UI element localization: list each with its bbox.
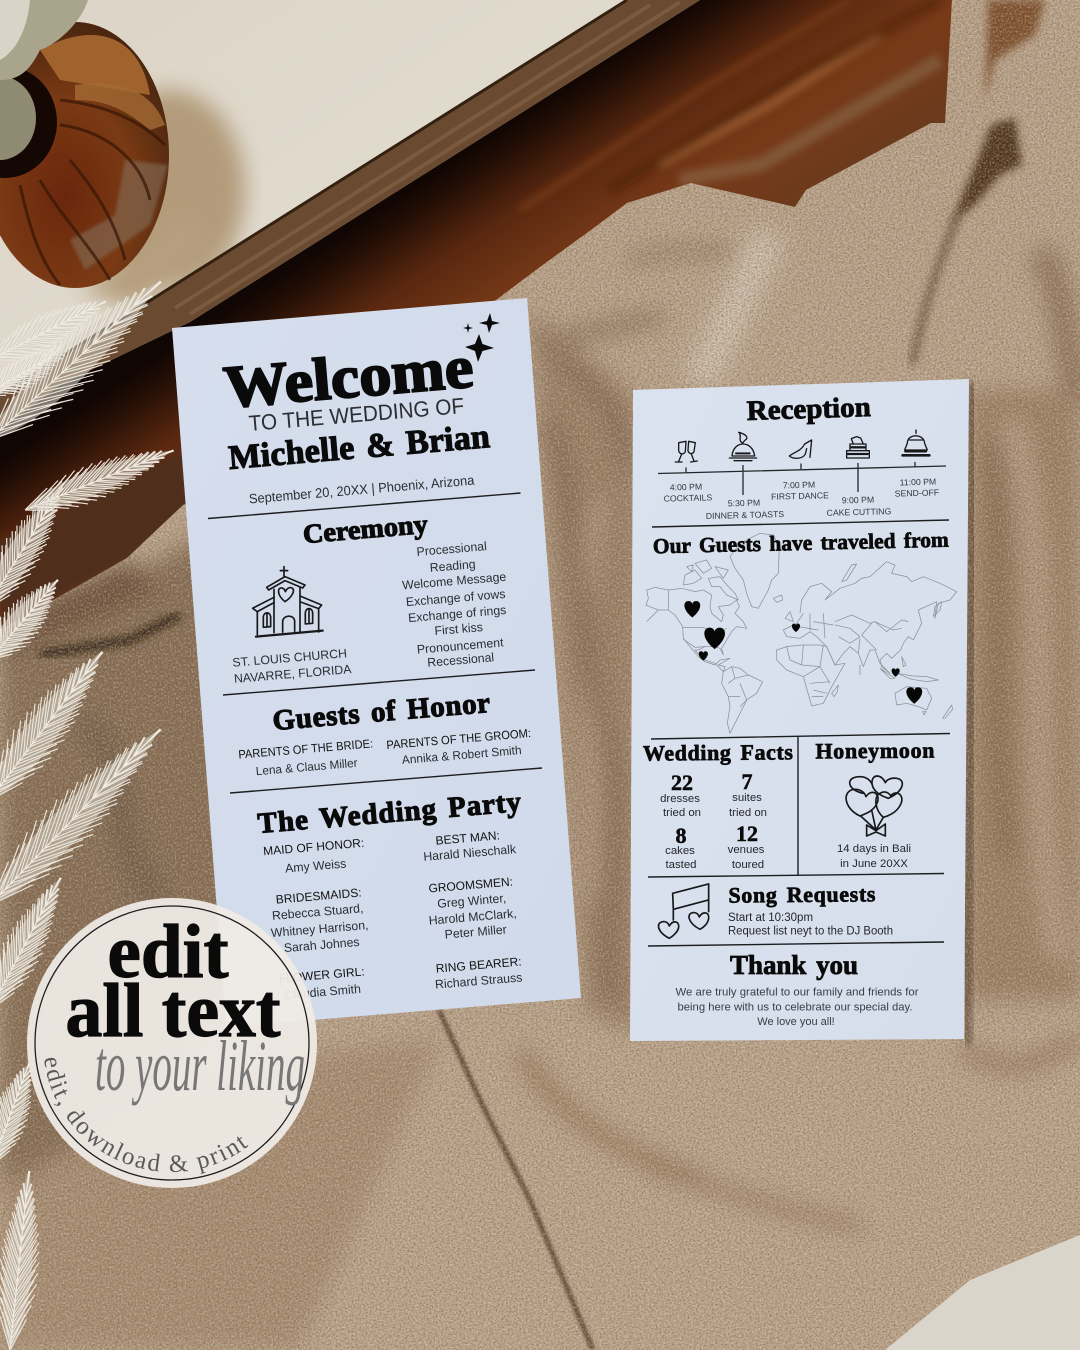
- church name and city: NAVARRE, FLORIDA: [233, 662, 353, 686]
- icon: music notes with hearts: [658, 884, 709, 938]
- church name and city: [232, 646, 353, 686]
- wedding party: right column: Harold McClark,: [428, 906, 517, 928]
- background: fabric folds near top right: [912, 0, 1045, 365]
- background: pampas grass plumes: [0, 261, 180, 1350]
- badge caption: edit, download and print: edit, download & print: [44, 1058, 248, 1174]
- chart: reception timeline: 11:00 PM: [900, 477, 936, 487]
- wedding facts numbers: 22: [671, 770, 693, 795]
- honeymoon details: 14 days in Bali: [837, 843, 911, 855]
- heading: Thank you: Thank you: [730, 950, 858, 980]
- wedding party: right column: RING BEARER:: [435, 954, 522, 976]
- wedding party: left column: BRIDESMAIDS:: [275, 885, 362, 907]
- ceremony order list: [402, 539, 507, 670]
- chart: reception timeline: 4:00 PM: [670, 482, 702, 492]
- map: Europe, Asia, Africa and Oceania: [777, 562, 957, 718]
- chart: reception timeline: 7:00 PM: [783, 480, 815, 490]
- background: cream corner: [885, 1235, 1080, 1350]
- ceremony order list: First kiss: [434, 620, 483, 638]
- wedding party: right column: GROOMSMEN:: [428, 874, 513, 896]
- wedding facts numbers: [660, 769, 767, 871]
- chart: reception timeline: FIRST DANCE: [771, 490, 829, 502]
- ceremony order list: Exchange of rings: [408, 603, 507, 625]
- wedding party: left column: [263, 836, 369, 1002]
- background: amber glass vase: [0, 0, 169, 288]
- wedding party: left column: Claudia Smith: [284, 982, 362, 1002]
- background: shadow beside vase: [80, 90, 245, 310]
- song request details: [728, 912, 893, 938]
- wedding facts numbers: 7: [742, 769, 752, 794]
- parents of the groom: Annika & Robert Smith: [401, 743, 522, 767]
- badge: edit all text: [27, 898, 317, 1188]
- wedding facts numbers: tasted: [665, 859, 697, 871]
- background: cream surface: [0, 0, 700, 460]
- title: Welcome: Welcome: [221, 334, 476, 420]
- ceremony order list: Exchange of vows: [405, 587, 506, 609]
- chart: reception timeline: SEND-OFF: [895, 487, 939, 499]
- heading: Reception: Reception: [746, 392, 872, 427]
- heading: The Wedding Party: The Wedding Party: [256, 786, 523, 840]
- wedding party: left column: MAID OF HONOR:: [263, 836, 365, 858]
- badge heading: edit: edit: [108, 910, 228, 994]
- wedding facts numbers: suites: [732, 792, 762, 804]
- wedding party: left column: Amy Weiss: [285, 856, 347, 876]
- wedding facts numbers: cakes: [665, 845, 695, 857]
- church name and city: ST. LOUIS CHURCH: [232, 646, 347, 670]
- wedding facts numbers: venues: [728, 844, 765, 856]
- heading: Guests of Honor: Guests of Honor: [271, 687, 491, 737]
- song request details: Start at 10:30pm: [728, 912, 813, 924]
- wedding party: right column: Harald Nieschalk: [423, 842, 517, 864]
- parents of the bride: [238, 736, 374, 778]
- wedding facts numbers: toured: [732, 859, 764, 871]
- icon: heart markers: [684, 601, 922, 704]
- wedding facts numbers: tried on: [663, 807, 701, 819]
- icon: champagne glasses: [675, 441, 697, 462]
- thank you message: We are truly grateful to our family and friends for: [676, 986, 919, 998]
- heading: Honeymoon: Honeymoon: [815, 737, 935, 764]
- thank you message: [676, 986, 919, 1028]
- wedding party: right column: [423, 828, 523, 992]
- chart: world map of guest origins: [646, 533, 957, 733]
- wedding facts numbers: 12: [736, 821, 758, 846]
- wedding facts numbers: 8: [676, 823, 686, 848]
- icon: getaway car: [903, 430, 929, 455]
- parents of the groom: [386, 726, 531, 767]
- parents of the bride: Lena & Claus Miller: [255, 756, 358, 778]
- wedding party: right column: Peter Miller: [444, 922, 507, 942]
- wedding party: left column: Rebecca Stuard,: [271, 901, 364, 923]
- ceremony order list: Processional: [416, 539, 487, 559]
- icon: high heel shoe: [789, 440, 812, 458]
- thank you message: We love you all!: [757, 1016, 835, 1028]
- honeymoon details: [837, 843, 911, 870]
- song request details: Request list neyt to the DJ Booth: [728, 926, 893, 938]
- honeymoon details: in June 20XX: [840, 858, 908, 870]
- wedding party: left column: Whitney Harrison,: [270, 918, 369, 940]
- chart: reception timeline: 9:00 PM: [842, 495, 874, 505]
- names: Michelle and Brian: Michelle & Brian: [227, 418, 491, 477]
- map: Americas and Greenland: [646, 533, 783, 733]
- icon: church: [253, 567, 323, 637]
- badge script: to your liking: to your liking: [95, 1026, 305, 1106]
- ceremony order list: Reading: [429, 557, 476, 575]
- chart: reception timeline: CAKE CUTTING: [826, 506, 892, 518]
- chart: reception timeline: COCKTAILS: [663, 492, 713, 504]
- heading: Song Requests: Song Requests: [728, 881, 876, 908]
- background: wooden tray: [0, 0, 960, 640]
- wedding party: right column: Greg Winter,: [437, 891, 507, 911]
- panel: program back card: [630, 379, 969, 1041]
- parents of the bride: PARENTS OF THE BRIDE:: [238, 736, 374, 762]
- chart: reception timeline: 5:30 PM: [728, 498, 760, 508]
- wedding party: right column: BEST MAN:: [435, 828, 500, 848]
- wedding party: left column: Sarah Johnes: [283, 935, 360, 955]
- wedding party: right column: Richard Strauss: [434, 970, 523, 992]
- chart: reception timeline: [658, 462, 946, 521]
- subtitle: to the wedding of: TO THE WEDDING OF: [248, 393, 465, 436]
- thank you message: being here with us to celebrate our special day.: [678, 1002, 912, 1014]
- date and location: September 20, 20XX | Phoenix, Arizona: [248, 473, 475, 506]
- icon: heart balloons with bow: [846, 776, 902, 836]
- badge heading: all text: all text: [66, 969, 280, 1053]
- ceremony order list: Recessional: [427, 650, 495, 670]
- heading: Wedding Facts: Wedding Facts: [643, 739, 793, 766]
- wedding facts numbers: dresses: [660, 793, 700, 805]
- icon: sparkle stars: [463, 313, 500, 362]
- parents of the groom: PARENTS OF THE GROOM:: [386, 726, 531, 752]
- ceremony order list: Pronouncement: [416, 635, 505, 657]
- panel: program front card: [172, 298, 581, 1027]
- icon: wedding cake: [847, 437, 869, 458]
- heading: Our Guests have traveled from: Our Guests have traveled from: [653, 528, 949, 558]
- icon: cloche dinner dome: [729, 432, 757, 461]
- ceremony order list: Welcome Message: [402, 570, 507, 592]
- chart: reception timeline: DINNER & TOASTS: [706, 509, 784, 521]
- wedding party: left column: FLOWER GIRL:: [278, 964, 365, 986]
- heading: Ceremony: Ceremony: [302, 509, 429, 549]
- wedding facts numbers: tried on: [729, 807, 767, 819]
